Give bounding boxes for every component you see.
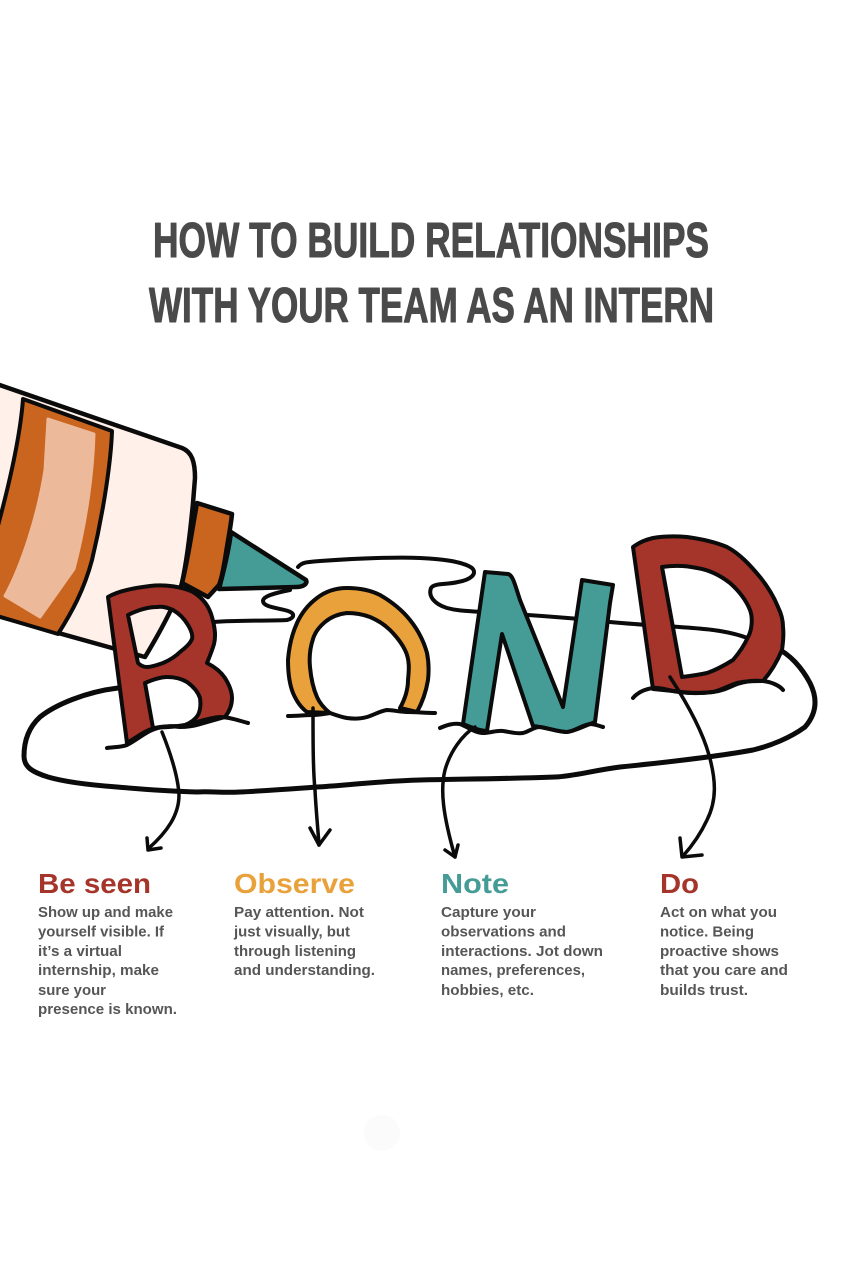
letter D (633, 536, 783, 698)
text block: Observe (233, 905, 375, 979)
text block: Be seen: yourself visible. If (38, 924, 164, 940)
text block: Do: Act on what you (660, 905, 777, 921)
glue trail (24, 558, 815, 792)
column: Do (660, 868, 788, 999)
orange band (0, 399, 112, 634)
text block: Observe: and understanding. (234, 963, 375, 979)
text block: Note (441, 905, 603, 999)
heading: Observe: Observe (234, 868, 355, 899)
text block: Observe: through listening (234, 944, 356, 960)
column: Be seen (38, 868, 177, 1018)
title (149, 213, 714, 333)
text block: Be seen: sure your (38, 983, 106, 999)
text block: Note: interactions. Jot down (441, 944, 603, 960)
heading: Do: Do (660, 868, 699, 899)
text block: Note: Capture your (441, 905, 536, 921)
column: Note (441, 868, 603, 999)
letter N (440, 572, 613, 733)
text block: Observe: just visually, but (233, 924, 350, 940)
text block: Be seen: it’s a virtual (38, 944, 122, 960)
text block: Do: proactive shows (660, 944, 779, 960)
letter O (288, 588, 435, 719)
arrow: D to Do (670, 677, 714, 857)
collar (182, 503, 232, 597)
letter B (107, 585, 248, 748)
text block: Note: observations and (441, 924, 566, 940)
heading: Be seen: Be seen (38, 868, 151, 899)
text block: Be seen: presence is known. (38, 1002, 177, 1018)
arrow: N to Note (443, 727, 475, 857)
text block: Do (660, 905, 788, 999)
arrow: B to Be seen (147, 732, 179, 850)
text block: Be seen: internship, make (38, 963, 159, 979)
text block: Be seen: Show up and make (38, 905, 173, 921)
bottle (0, 383, 306, 657)
arrow: O to Observe (310, 708, 330, 845)
column: Observe (233, 868, 375, 979)
text block: Note: hobbies, etc. (441, 983, 534, 999)
text block: Observe: Pay attention. Not (234, 905, 364, 921)
text block: Be seen (38, 905, 177, 1018)
illustration: glue bottle writing BOND (0, 383, 815, 857)
text block: Do: that you care and (660, 963, 788, 979)
text block: Do: notice. Being (660, 924, 754, 940)
nozzle (219, 532, 306, 589)
text block: Do: builds trust. (660, 983, 748, 999)
text block: Note: names, preferences, (441, 963, 585, 979)
heading: Note: Note (441, 868, 509, 899)
bottle body (0, 383, 195, 657)
band highlight (5, 419, 94, 617)
